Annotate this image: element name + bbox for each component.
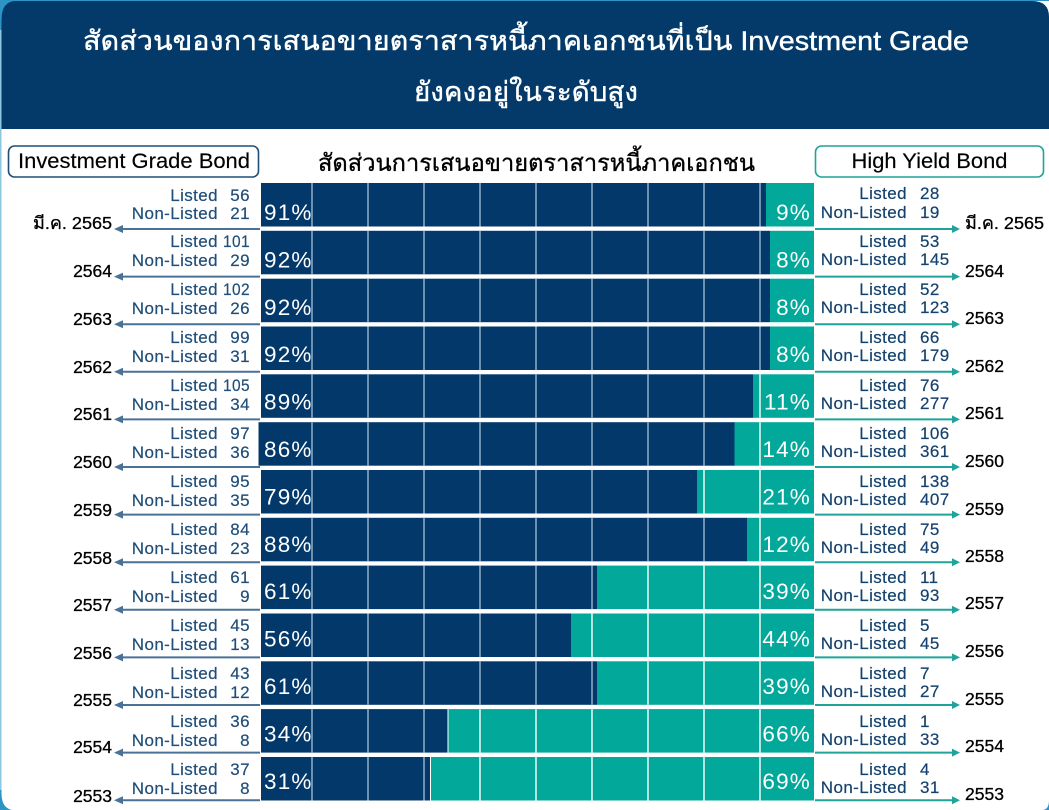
counts: 2560: Listed [859, 424, 907, 443]
bar: 2561 [261, 374, 814, 418]
left year labels: 2563 [73, 309, 112, 329]
bar: 2558: 12% [762, 532, 811, 557]
counts: 2553 [132, 760, 250, 798]
counts: 2555: Non-Listed [821, 682, 907, 701]
counts: 2557: 93 [920, 586, 940, 605]
left year labels: 2557 [73, 595, 112, 615]
counts: 2556: Listed [170, 616, 218, 635]
counts: 2559 [132, 472, 250, 510]
counts: 2561: Listed [859, 376, 907, 395]
bar: 2562 [261, 326, 814, 370]
counts: 2557: Non-Listed [821, 586, 907, 605]
counts: 2558: Listed [170, 520, 218, 539]
counts: 2562: 99 [230, 328, 250, 347]
counts: 2562: 31 [230, 347, 250, 366]
bar: 2559 [261, 470, 814, 514]
counts: 2563: 52 [920, 280, 940, 299]
bar: 2555 [261, 661, 814, 705]
left arrows [114, 225, 260, 804]
counts: 2557: Listed [170, 568, 218, 587]
counts: 2558: 49 [920, 538, 940, 557]
counts: 2563: 102 [223, 280, 250, 299]
bar: 2561: 89% [264, 390, 313, 415]
counts: มี.ค. 2565: Listed [170, 186, 218, 205]
bar: มี.ค. 2565: 91% [264, 200, 313, 225]
counts: 2563 [821, 280, 950, 317]
right year labels: 2563 [965, 308, 1004, 328]
right year labels: 2556 [965, 641, 1004, 661]
counts: 2564: Non-Listed [132, 251, 218, 270]
counts: 2558: 84 [230, 520, 250, 539]
counts: 2564: 101 [223, 232, 250, 251]
counts: 2557 [821, 568, 940, 605]
counts: 2554 [132, 712, 250, 750]
counts: 2564: Listed [859, 232, 907, 251]
counts: 2555: Listed [859, 664, 907, 683]
counts: 2555: Listed [170, 664, 218, 683]
counts: 2562 [132, 328, 250, 366]
counts: มี.ค. 2565: 21 [230, 204, 250, 223]
counts: 2560: 361 [920, 442, 950, 461]
counts: 2556 [821, 616, 940, 653]
counts: 2555 [132, 664, 250, 702]
right year labels: 2560 [965, 451, 1004, 471]
counts: 2553: Non-Listed [821, 778, 907, 797]
legend: Investment Grade Bond [8, 146, 258, 177]
bar: 2553: 31% [264, 769, 313, 794]
counts: 2554: 33 [920, 730, 940, 749]
counts: 2555: 27 [920, 682, 940, 701]
left year labels: 2560 [73, 452, 112, 472]
counts: 2553: 37 [230, 760, 250, 779]
counts: 2562: Listed [170, 328, 218, 347]
bar: 2555: 61% [264, 674, 313, 699]
counts: 2561: Listed [170, 376, 218, 395]
counts: 2555: Non-Listed [132, 683, 218, 702]
left year labels: 2561 [73, 404, 112, 424]
counts: 2562: 66 [920, 328, 940, 347]
bar: 2553: 69% [762, 769, 811, 794]
counts: 2560: Non-Listed [821, 442, 907, 461]
counts: 2557: 11 [920, 568, 938, 587]
counts: 2564: 53 [920, 232, 940, 251]
counts: 2557: Listed [859, 568, 907, 587]
left year labels: 2554 [73, 737, 112, 757]
counts: 2563: 26 [230, 299, 250, 318]
counts: 2557: 9 [240, 587, 250, 606]
counts: 2557 [132, 568, 250, 606]
counts: 2561: Non-Listed [132, 395, 218, 414]
counts: 2553 [821, 760, 940, 797]
counts: 2561 [821, 376, 950, 413]
counts: มี.ค. 2565 [132, 186, 250, 223]
left year labels: 2553 [73, 786, 112, 806]
right year labels: 2555 [965, 689, 1004, 709]
right year labels: 2557 [965, 593, 1004, 613]
counts: 2558: Non-Listed [821, 538, 907, 557]
bar: 2564: 8% [776, 247, 811, 272]
bar: 2559: 79% [264, 484, 313, 509]
right year labels: 2561 [965, 403, 1004, 423]
bar: 2562: 8% [776, 342, 811, 367]
counts: 2562 [821, 328, 950, 365]
counts: 2560: Non-Listed [132, 443, 218, 462]
counts: มี.ค. 2565: Non-Listed [821, 203, 907, 222]
bar: มี.ค. 2565: 9% [776, 200, 811, 225]
left year labels: มี.ค. 2565 [33, 213, 112, 233]
counts: 2556: 5 [920, 616, 930, 635]
counts: 2560: 97 [230, 424, 250, 443]
counts: 2556: Listed [859, 616, 907, 635]
counts: 2557: Non-Listed [132, 587, 218, 606]
counts: 2562: Non-Listed [821, 346, 907, 365]
bar: 2560 [258, 422, 814, 466]
counts: 2558: 75 [920, 520, 940, 539]
counts: 2554: 8 [240, 731, 250, 750]
counts: มี.ค. 2565 [821, 184, 940, 222]
bar: มี.ค. 2565 [261, 183, 814, 226]
bar: 2562: 92% [264, 342, 313, 367]
bar: 2556 [261, 614, 814, 657]
counts: 2556: Non-Listed [132, 635, 218, 654]
counts: 2561: 34 [230, 395, 250, 414]
counts: 2559: Listed [170, 472, 218, 491]
counts: มี.ค. 2565: 19 [920, 203, 940, 222]
counts: 2563 [132, 280, 250, 318]
counts: 2554 [821, 712, 940, 749]
counts: 2553: 8 [240, 779, 250, 798]
bar: 2560: 14% [762, 437, 811, 462]
counts: 2564: Non-Listed [821, 250, 907, 269]
left year labels: 2555 [73, 690, 112, 710]
bar: 2559: 21% [762, 484, 811, 509]
counts: 2563: Non-Listed [132, 299, 218, 318]
left year labels: 2556 [73, 643, 112, 663]
counts: 2554: Listed [859, 712, 907, 731]
counts: 2559: 407 [920, 490, 950, 509]
counts: มี.ค. 2565: Non-Listed [132, 204, 218, 223]
counts: 2562: Listed [859, 328, 907, 347]
counts: 2553: Non-Listed [132, 779, 218, 798]
counts: 2559: Non-Listed [132, 491, 218, 510]
counts: มี.ค. 2565: 28 [920, 184, 940, 203]
counts: 2564 [821, 232, 950, 269]
panel: high yield issuer counts [821, 184, 950, 797]
counts: 2553: Listed [859, 760, 907, 779]
counts: 2558: Listed [859, 520, 907, 539]
bar: 2564 [261, 231, 814, 274]
counts: 2564: 145 [920, 250, 950, 269]
title banner: ยังคงอยู่ในระดับสูง [414, 76, 638, 108]
counts: 2564: Listed [170, 232, 218, 251]
counts: 2563: Listed [859, 280, 907, 299]
bar: 2557: 39% [762, 579, 811, 604]
bar: 2556: 44% [762, 627, 811, 652]
bar: 2558: 88% [264, 532, 313, 557]
bar: 2561: 11% [764, 390, 811, 415]
left year labels: 2559 [73, 500, 112, 520]
counts: 2564: 29 [230, 251, 250, 270]
counts: 2560: 36 [230, 443, 250, 462]
counts: 2562: Non-Listed [132, 347, 218, 366]
legend: High Yield Bond: High Yield Bond [852, 150, 1008, 173]
bar: 2554: 66% [762, 721, 811, 746]
right year labels: 2553 [965, 784, 1004, 804]
counts: 2554: Non-Listed [132, 731, 218, 750]
title banner [2, 1, 1049, 129]
right year labels: มี.ค. 2565 [965, 213, 1044, 233]
counts: 2559: Listed [859, 472, 907, 491]
bar: 2560: 86% [264, 437, 313, 462]
counts: มี.ค. 2565: 56 [230, 186, 250, 205]
counts: 2561 [132, 376, 250, 414]
right year labels: 2559 [965, 499, 1004, 519]
counts: 2559: 138 [920, 472, 950, 491]
left year labels [33, 213, 112, 806]
chart heading: สัดส่วนการเสนอขายตราสารหนี้ภาคเอกชน [318, 145, 755, 177]
left year labels: 2558 [73, 548, 112, 568]
panel: investment grade issuer counts [132, 186, 250, 798]
counts: 2557: 61 [230, 568, 250, 587]
bar: 2563: 8% [776, 295, 811, 320]
counts: 2553: Listed [170, 760, 218, 779]
counts: 2553: 31 [920, 778, 940, 797]
counts: 2563: Listed [170, 280, 218, 299]
counts: 2560: 106 [920, 424, 950, 443]
bar: 2555: 39% [762, 674, 811, 699]
counts: 2558: Non-Listed [132, 539, 218, 558]
right year labels: 2554 [965, 736, 1004, 756]
counts: 2554: 1 [920, 712, 930, 731]
counts: 2561: 76 [920, 376, 940, 395]
bar: 2564: 92% [264, 247, 313, 272]
counts: 2559: 35 [230, 491, 250, 510]
bar: 2554: 34% [264, 721, 313, 746]
legend: Investment Grade Bond: Investment Grade Bond [18, 150, 250, 173]
counts: 2558 [821, 520, 940, 557]
counts: 2561: 277 [920, 394, 950, 413]
counts: 2554: Listed [170, 712, 218, 731]
counts: 2555: 12 [230, 683, 250, 702]
counts: 2556 [132, 616, 250, 654]
bar: 2556: 56% [264, 627, 313, 652]
bar: 2563: 92% [264, 295, 313, 320]
title banner: สัดส่วนของการเสนอขายตราสารหนี้ภาคเอกชนที่เป็น Investment Grade [83, 21, 969, 56]
counts: 2556: 13 [230, 635, 250, 654]
counts: 2556: 45 [230, 616, 250, 635]
counts: 2559: Non-Listed [821, 490, 907, 509]
counts: 2554: 36 [230, 712, 250, 731]
left year labels: 2562 [73, 357, 112, 377]
right year labels [965, 213, 1044, 804]
right arrows [815, 225, 960, 804]
counts: 2553: 4 [920, 760, 930, 779]
counts: 2559: 95 [230, 472, 250, 491]
counts: 2558: 23 [230, 539, 250, 558]
counts: 2556: Non-Listed [821, 634, 907, 653]
counts: 2555: 43 [230, 664, 250, 683]
legend: High Yield Bond [816, 146, 1044, 177]
left year labels: 2564 [73, 261, 112, 281]
right year labels: 2558 [965, 546, 1004, 566]
counts: 2555: 7 [920, 664, 930, 683]
counts: 2554: Non-Listed [821, 730, 907, 749]
right year labels: 2562 [965, 356, 1004, 376]
counts: 2560 [821, 424, 950, 461]
counts: 2556: 45 [920, 634, 940, 653]
bar: 2553 [261, 757, 814, 800]
counts: 2559 [821, 472, 950, 509]
bar: 2557 [261, 566, 814, 609]
right year labels: 2564 [965, 261, 1004, 281]
counts: 2560 [132, 424, 250, 462]
counts: มี.ค. 2565: Listed [859, 184, 907, 203]
counts: 2561: Non-Listed [821, 394, 907, 413]
counts: 2555 [821, 664, 940, 701]
counts: 2562: 179 [920, 346, 950, 365]
bar: 2558 [261, 518, 814, 561]
counts: 2563: Non-Listed [821, 298, 907, 317]
stacked bar chart [258, 183, 814, 800]
bar: 2554 [261, 709, 814, 753]
bar: 2557: 61% [264, 579, 313, 604]
counts: 2560: Listed [170, 424, 218, 443]
counts: 2561: 105 [223, 376, 250, 395]
counts: 2558 [132, 520, 250, 558]
bar: 2563 [261, 279, 814, 322]
counts: 2563: 123 [920, 298, 950, 317]
counts: 2564 [132, 232, 250, 270]
